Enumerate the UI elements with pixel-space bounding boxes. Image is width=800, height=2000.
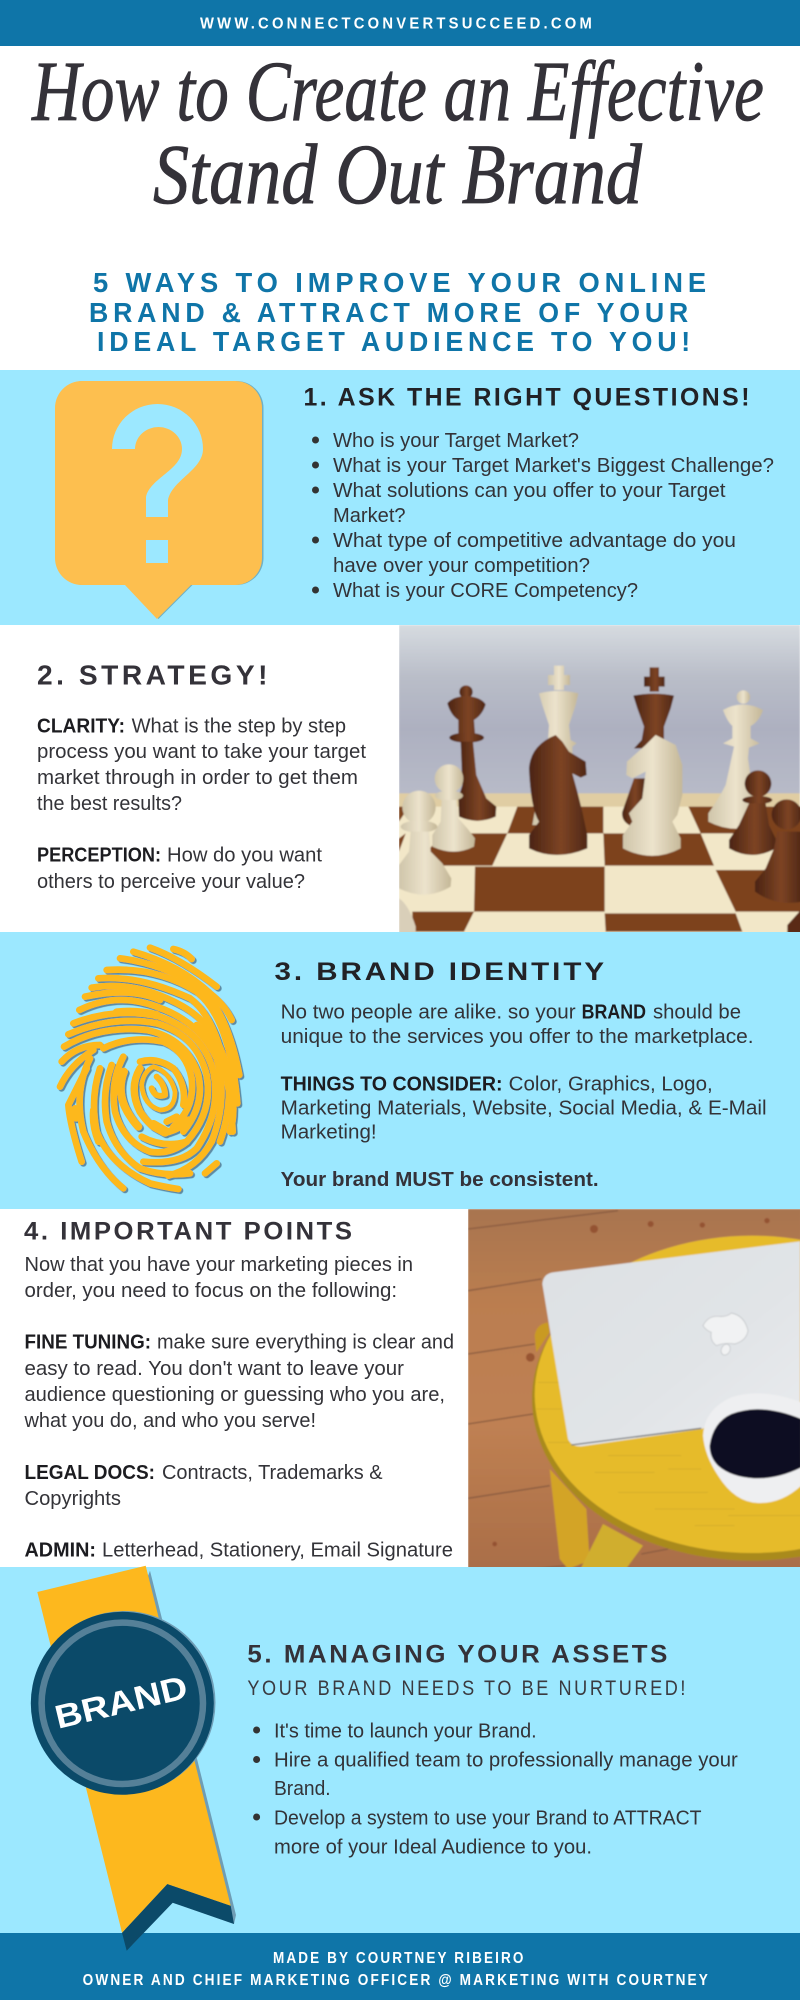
important points text: easy to read. You don't want to leave your (24, 1358, 404, 1380)
panel: 1 ask the right questions (0, 370, 800, 625)
subheading 5: YOUR BRAND NEEDS TO BE NURTURED! (247, 1677, 688, 1700)
chess: dark knight (529, 735, 587, 855)
chess: white king (532, 666, 578, 825)
chess: white queen (708, 690, 763, 829)
subtitle: BRAND & ATTRACT MORE OF YOUR (89, 297, 693, 328)
heading 4: 4. IMPORTANT POINTS (24, 1218, 355, 1246)
important points text: make sure everything is clear and (157, 1332, 454, 1354)
chess: cropped dark piece (787, 908, 800, 933)
assets list: more of your Ideal Audience to you. (274, 1836, 592, 1858)
ribbon (37, 1566, 231, 1933)
heading 2: 2. STRATEGY! (37, 660, 271, 690)
laptop edge (571, 1428, 701, 1445)
brand identity text: BRAND (582, 1001, 646, 1023)
brand identity text: unique to the services you offer to the marketplace. (281, 1026, 754, 1048)
strategy text: process you want to take your target (37, 741, 366, 763)
assets list (253, 1720, 738, 1858)
ribbon tail fold (122, 1884, 234, 1951)
strategy text (37, 716, 366, 893)
chess: dark king (622, 667, 674, 827)
footer: MADE BY COURTNEY RIBEIRO (273, 1950, 526, 1967)
important points text: what you do, and who you serve! (24, 1410, 316, 1432)
brand identity text: THINGS TO CONSIDER: (281, 1073, 503, 1095)
footer (0, 1933, 800, 2000)
ribbon shadow (100, 1571, 236, 1945)
title (31, 43, 764, 222)
brand identity text: should be (653, 1001, 741, 1023)
chess: white pawn front (399, 791, 451, 895)
footer: OWNER AND CHIEF MARKETING OFFICER @ MARKETING WITH COURTNEY (83, 1972, 710, 1989)
chess: dark queen (447, 685, 496, 821)
brand identity text: No two people are alike. so your (281, 1001, 576, 1023)
panel: 3 brand identity (0, 932, 800, 1209)
brand identity text: Color, Graphics, Logo, (509, 1073, 713, 1095)
important points text: LEGAL DOCS: (24, 1462, 155, 1484)
assets list: Hire a qualified team to professionally manage your (274, 1750, 738, 1772)
chess: white knight (623, 735, 682, 856)
coffee cup (703, 1393, 800, 1503)
panel: 4 important points (24, 1209, 800, 1571)
chess: dark pawn far right (755, 799, 800, 903)
heading 1: 1. ASK THE RIGHT QUESTIONS! (304, 384, 752, 412)
question list: have over your competition? (333, 555, 590, 577)
question list: What solutions can you offer to your Target (333, 480, 726, 502)
strategy text: PERCEPTION: (37, 844, 161, 866)
photo: chess pieces on a board (399, 625, 800, 935)
badge shadow (32, 1611, 216, 1794)
badge (31, 1612, 214, 1795)
question list: What is your Target Market's Biggest Challenge? (333, 455, 774, 477)
chess: white pawn back (432, 764, 475, 852)
question list: What is your CORE Competency? (333, 580, 638, 602)
important points text: Now that you have your marketing pieces in (24, 1254, 413, 1276)
strategy text: the best results? (37, 793, 182, 815)
important points text: Contracts, Trademarks & (162, 1462, 383, 1484)
question list: What type of competitive advantage do you (333, 530, 736, 552)
subtitle: IDEAL TARGET AUDIENCE TO YOU! (97, 326, 695, 357)
photo: laptop and coffee on a yellow stool (468, 1209, 800, 1571)
strategy text: others to perceive your value? (37, 871, 305, 893)
question list: Market? (333, 505, 406, 527)
panel: 5 managing your assets (0, 1567, 800, 1933)
assets list: It's time to launch your Brand. (274, 1720, 537, 1742)
question list (312, 430, 774, 602)
apple logo (703, 1313, 748, 1357)
important points text: Letterhead, Stationery, Email Signature (102, 1540, 453, 1562)
brand identity text (281, 1001, 767, 1191)
brand identity text: Your brand MUST be consistent. (281, 1169, 599, 1191)
icon: fingerprint (60, 948, 239, 1189)
top banner with website (0, 0, 800, 46)
icon: question mark speech bubble (55, 381, 264, 619)
badge label: BRAND (51, 1668, 191, 1736)
coffee (710, 1409, 800, 1478)
assets list: Brand. (274, 1778, 331, 1800)
chess: cropped white piece (399, 898, 416, 933)
top banner with website: WWW.CONNECTCONVERTSUCCEED.COM (200, 16, 595, 32)
icon: brand ribbon badge (31, 1566, 236, 1951)
brand identity text: Marketing! (281, 1122, 377, 1144)
important points text: Copyrights (24, 1488, 121, 1510)
heading 3: 3. BRAND IDENTITY (274, 958, 607, 986)
strategy text: What is the step by step (132, 716, 346, 738)
strategy text: market through in order to get them (37, 767, 358, 789)
laptop (542, 1241, 800, 1446)
important points text: FINE TUNING: (24, 1332, 151, 1354)
subtitle: 5 WAYS TO IMPROVE YOUR ONLINE (93, 267, 711, 298)
heading 5: 5. MANAGING YOUR ASSETS (247, 1641, 670, 1669)
badge ring (42, 1623, 203, 1784)
chess: dark pawn (729, 770, 776, 855)
strategy text: CLARITY: (37, 716, 125, 738)
panel: 2 strategy (37, 625, 800, 935)
brand identity text: Marketing Materials, Website, Social Media, & E-Mail (281, 1098, 767, 1120)
title: Stand Out Brand (153, 126, 643, 222)
strategy text: How do you want (167, 844, 322, 866)
subtitle (89, 267, 711, 357)
important points text: audience questioning or guessing who you are, (24, 1384, 445, 1406)
stool seat (532, 1236, 800, 1561)
question list: Who is your Target Market? (333, 430, 579, 452)
important points text: order, you need to focus on the following: (24, 1280, 397, 1302)
stool legs (535, 1322, 643, 1571)
important points text (24, 1254, 454, 1562)
assets list: Develop a system to use your Brand to ATTRACT (274, 1807, 702, 1829)
important points text: ADMIN: (24, 1540, 96, 1562)
